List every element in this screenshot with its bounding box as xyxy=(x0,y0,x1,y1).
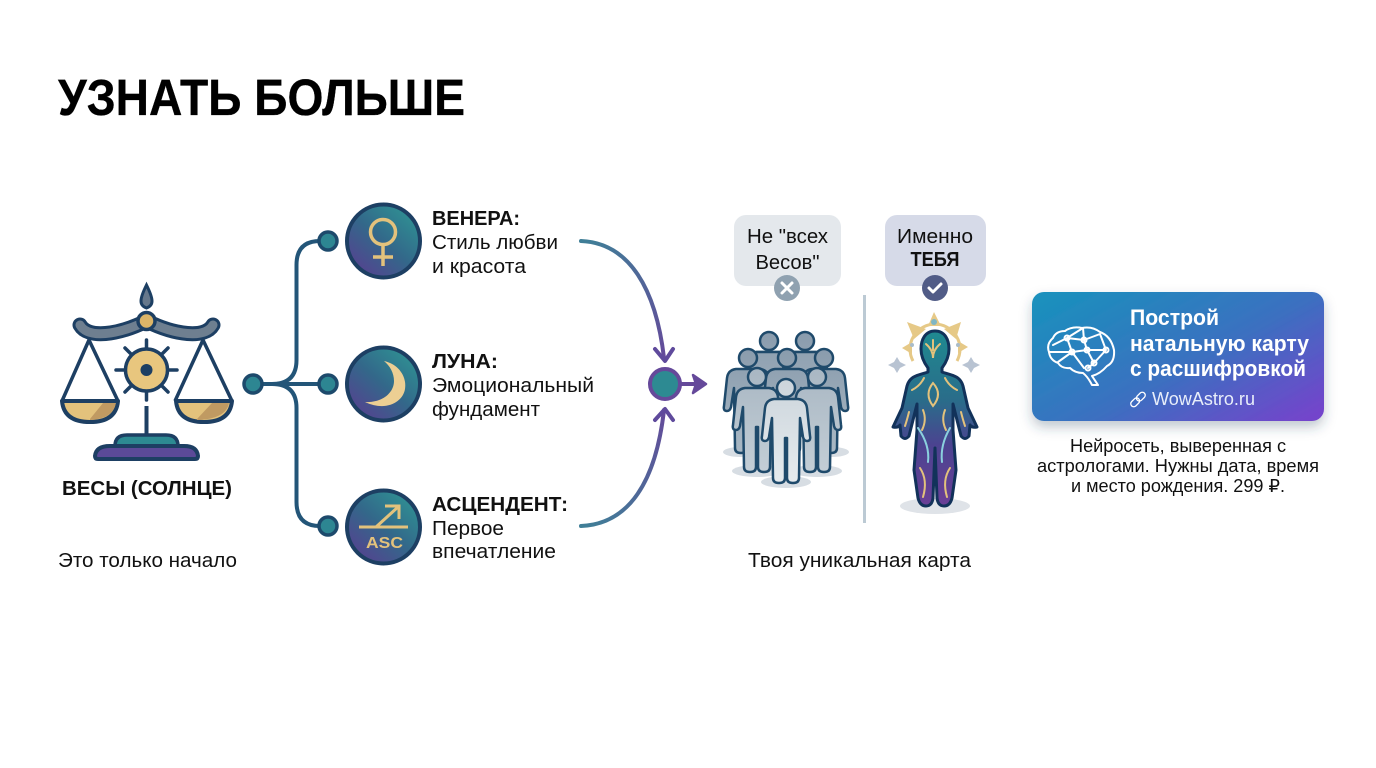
icon: link xyxy=(1130,391,1146,408)
branching connector xyxy=(244,232,337,535)
icon: libra scales xyxy=(62,285,232,459)
text: Moon: ЛУНА: xyxy=(432,351,498,373)
icon: neural brain xyxy=(1048,327,1114,385)
icon: Ascendant xyxy=(347,490,420,564)
text: Venus: ВЕНЕРА: xyxy=(432,208,520,230)
text: Moon: Эмоциональный xyxy=(432,375,594,397)
text: Ascendant: Первое xyxy=(432,518,504,540)
callout: not all Libras: Не "всех xyxy=(747,226,828,248)
icon: unique glowing figure xyxy=(888,312,980,514)
callout: not all Libras xyxy=(734,215,841,301)
text: Venus: Стиль любви xyxy=(432,232,558,254)
merge node with arrow xyxy=(650,369,706,399)
callout: exactly you xyxy=(885,215,986,301)
icon: Moon xyxy=(347,348,420,420)
arrow: bottom curve into node xyxy=(581,409,673,526)
text: Venus: и красота xyxy=(432,256,527,278)
text: Venus xyxy=(432,208,558,278)
text: Moon: фундамент xyxy=(432,399,540,421)
sun halo xyxy=(902,312,968,361)
text: description: и место рождения. 299 ₽. xyxy=(1071,476,1285,496)
callout: exactly you: Именно xyxy=(897,226,973,248)
CTA card: WowAstro.ru xyxy=(1152,389,1255,409)
text: only the beginning: Это только начало xyxy=(58,550,237,572)
icon: crowd of people xyxy=(723,332,849,488)
CTA card: Построй xyxy=(1130,305,1219,330)
text: Moon xyxy=(432,351,594,421)
text: Ascendant: впечатление xyxy=(432,541,556,563)
label: Libra (Sun): ВЕСЫ (СОЛНЦЕ) xyxy=(62,478,232,500)
text: description: Нейросеть, выверенная с xyxy=(1070,436,1286,456)
icon: Venus xyxy=(347,204,420,278)
text: Ascendant xyxy=(432,494,568,563)
text: Ascendant: АСЦЕНДЕНТ: xyxy=(432,494,568,516)
CTA card: с расшифровкой xyxy=(1130,356,1306,381)
text: description: астрологами. Нужны дата, время xyxy=(1037,456,1319,476)
icon: Ascendant: ASC xyxy=(366,535,403,552)
CTA card: натальную карту xyxy=(1130,331,1310,356)
text: your unique chart: Твоя уникальная карта xyxy=(748,550,972,572)
arrow: top curve into node xyxy=(581,241,673,361)
callout: exactly you: ТЕБЯ xyxy=(910,249,960,271)
divider xyxy=(863,295,866,523)
callout: not all Libras: Весов" xyxy=(756,252,820,274)
CTA card xyxy=(1032,292,1324,421)
title: УЗНАТЬ БОЛЬШЕ xyxy=(58,69,465,126)
text: description xyxy=(1037,436,1319,496)
